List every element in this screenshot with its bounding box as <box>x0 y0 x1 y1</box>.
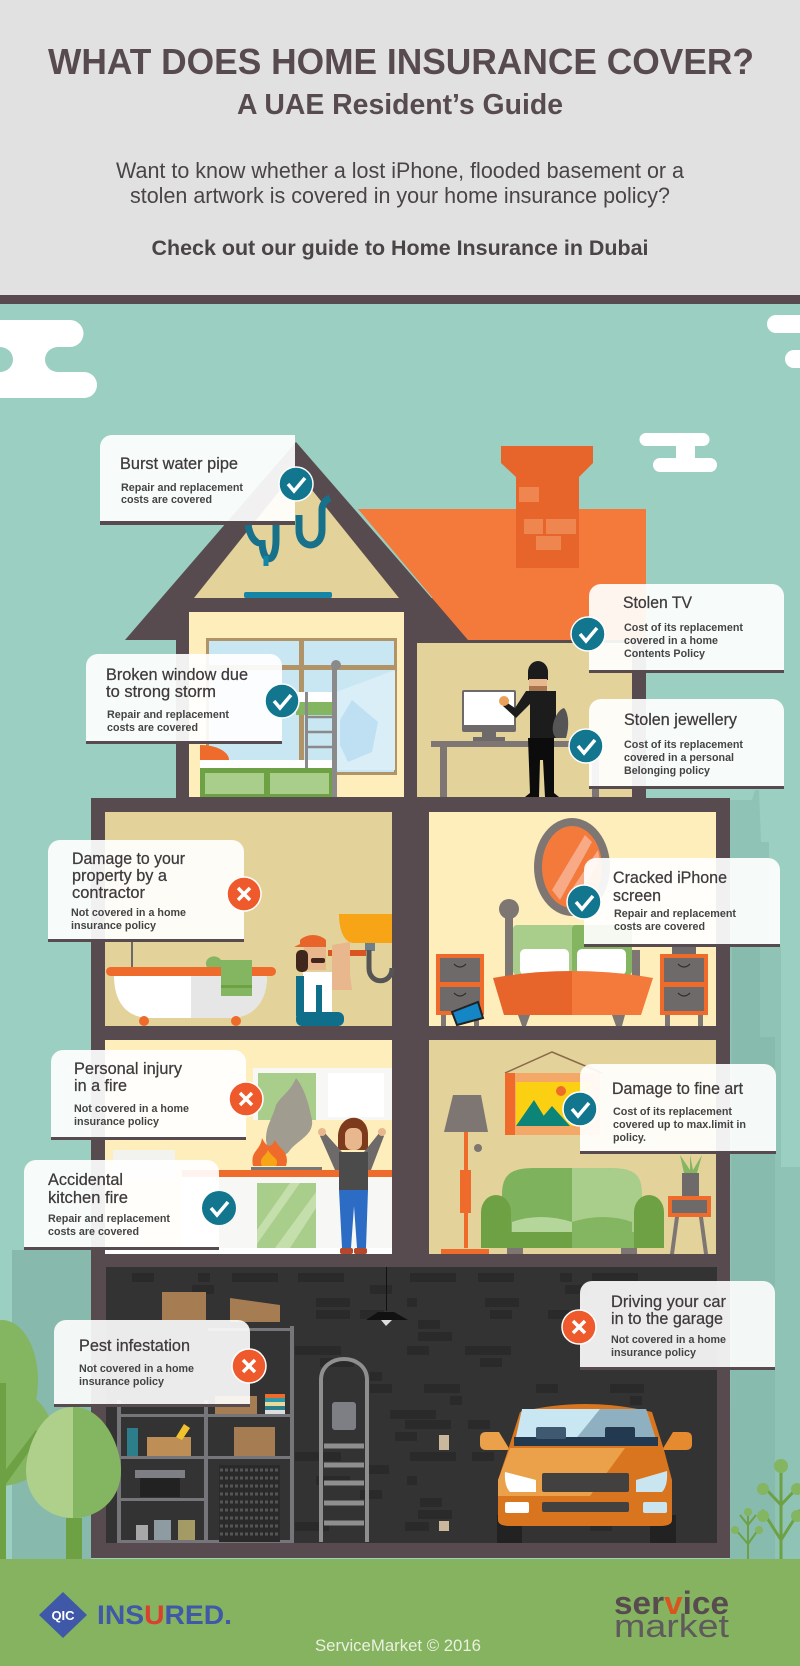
card: Broken window: costs are covered <box>107 722 198 734</box>
cloud: top right <box>767 315 800 368</box>
intro text: stolen artwork is covered in your home insurance policy? <box>130 183 670 208</box>
card: Stolen jewellery: Stolen jewellery <box>624 711 738 729</box>
toolbox dark <box>135 1470 185 1497</box>
card: Stolen jewellery <box>569 699 784 789</box>
nightstand: left <box>436 954 484 1026</box>
house: main floors frame <box>91 798 730 1558</box>
logo: ServiceMarket: market <box>614 1608 729 1644</box>
house: attic frame <box>125 442 468 640</box>
logo: ServiceMarket: service <box>614 1585 729 1621</box>
card: Personal injury: Personal injury <box>74 1060 183 1078</box>
bed <box>493 899 653 1026</box>
card: Contractor damage: Not covered in a home <box>71 907 186 919</box>
card: Contractor damage: property by a <box>72 867 168 885</box>
cloud: top left <box>0 320 97 398</box>
card: Accidental kitchen fire <box>24 1160 236 1250</box>
logo: QIC Insured <box>39 1592 232 1638</box>
roof: orange <box>358 509 646 640</box>
card: Stolen jewellery: Belonging policy <box>624 765 711 777</box>
card: Accidental kitchen fire: costs are covered <box>48 1226 139 1238</box>
card: Driving your car: Driving your car <box>611 1293 726 1311</box>
icon: check <box>279 467 313 501</box>
rack of tyres <box>219 1465 280 1542</box>
smoke <box>266 1078 312 1156</box>
card: Damage to fine art: policy. <box>613 1132 646 1144</box>
card: Broken window <box>86 654 299 744</box>
card: Damage to fine art: Damage to fine art <box>612 1080 743 1098</box>
icon: computer monitor <box>462 690 516 741</box>
side table with plant <box>668 1155 711 1254</box>
fire <box>251 1138 322 1170</box>
call to action: Check out our guide to Home Insurance in Dubai <box>152 236 648 260</box>
card: Burst water pipe: Burst water pipe <box>120 455 238 473</box>
card: Cracked iPhone: Cracked iPhone <box>613 869 727 887</box>
panel: garage <box>106 1267 717 1543</box>
card: Accidental kitchen fire: kitchen fire <box>48 1189 128 1207</box>
stacked books <box>265 1394 285 1414</box>
header divider band <box>0 295 800 304</box>
ground <box>0 1559 800 1666</box>
tree: left light <box>26 1407 121 1559</box>
icon: burst pipes <box>248 498 330 566</box>
shelving unit <box>117 1292 294 1543</box>
icon: check <box>567 885 601 919</box>
subtitle: A UAE Resident’s Guide <box>237 89 563 121</box>
logo: ServiceMarket <box>614 1585 729 1644</box>
card: Stolen jewellery: Cost of its replacement <box>624 739 743 751</box>
card: Driving your car <box>562 1281 775 1370</box>
boxes <box>127 1292 280 1456</box>
painting <box>505 1052 602 1135</box>
card: Contractor damage: insurance policy <box>71 920 157 932</box>
woman <box>318 1118 386 1254</box>
card: Broken window: Repair and replacement <box>107 709 229 721</box>
card: Damage to fine art: Cost of its replacement <box>613 1106 732 1118</box>
burglar <box>499 661 568 797</box>
card: Stolen TV <box>571 584 784 673</box>
panel: bedroom <box>429 812 716 1026</box>
QIC diamond: QIC <box>51 1608 75 1623</box>
card: Cracked iPhone: costs are covered <box>614 921 705 933</box>
car <box>480 1404 692 1543</box>
plumber <box>294 914 392 1026</box>
mirror <box>534 818 610 916</box>
floor lamp <box>441 1095 489 1254</box>
card: Accidental kitchen fire: Repair and replacement <box>48 1213 170 1225</box>
card: Contractor damage <box>48 840 261 942</box>
icon: check <box>571 617 605 651</box>
card: Contractor damage: Damage to your <box>72 850 185 868</box>
panel: sky background <box>0 304 800 1560</box>
title: WHAT DOES HOME INSURANCE COVER? <box>48 41 754 82</box>
icon: check <box>563 1092 597 1126</box>
icon: check <box>569 729 603 763</box>
card: Damage to fine art: covered up to max.limit in <box>613 1119 746 1131</box>
card: Burst water pipe: costs are covered <box>121 494 212 506</box>
plants: right <box>731 1459 800 1559</box>
background: skyscraper right <box>730 790 800 1559</box>
bathtub <box>106 956 276 1026</box>
card: Damage to fine art <box>563 1064 776 1154</box>
cloud: near chimney <box>640 433 717 472</box>
card: Stolen TV: Contents Policy <box>624 648 706 660</box>
card: Personal injury: Not covered in a home <box>74 1103 189 1115</box>
icon: check <box>265 684 299 718</box>
card: Stolen TV: Cost of its replacement <box>624 622 743 634</box>
light switches <box>439 1435 449 1531</box>
intro text: Want to know whether a lost iPhone, flooded basement or a <box>116 158 684 183</box>
sofa <box>481 1168 664 1254</box>
card: Burst water pipe <box>100 435 313 525</box>
panel: header <box>0 0 800 295</box>
house: upper walls <box>176 598 646 800</box>
card: Stolen jewellery: covered in a personal <box>624 752 734 764</box>
icon: cross <box>229 1082 263 1116</box>
panel: bathroom <box>105 812 392 1026</box>
background: building left <box>12 1250 91 1559</box>
ceiling lamp <box>366 1267 408 1326</box>
card: Driving your car: Not covered in a home <box>611 1334 726 1346</box>
tree: left dark <box>0 1320 53 1559</box>
icon: cross <box>227 877 261 911</box>
logo: QIC Insured: INSURED. <box>97 1600 232 1630</box>
card: Stolen TV: covered in a home <box>624 635 718 647</box>
nightstand: right <box>660 947 708 1026</box>
icon: cross <box>562 1310 596 1344</box>
card: Personal injury <box>51 1050 263 1140</box>
footer credit: ServiceMarket © 2016 <box>315 1636 481 1655</box>
panel: office room <box>417 643 632 797</box>
card: Accidental kitchen fire: Accidental <box>48 1171 123 1189</box>
card: Stolen TV: Stolen TV <box>623 594 692 612</box>
card: Personal injury: insurance policy <box>74 1116 160 1128</box>
card: Driving your car: in to the garage <box>611 1310 723 1328</box>
card: Personal injury: in a fire <box>74 1077 127 1095</box>
card: Driving your car: insurance policy <box>611 1347 697 1359</box>
card: Cracked iPhone: screen <box>613 887 661 905</box>
card: Contractor damage: contractor <box>72 884 145 902</box>
card: Pest infestation: Pest infestation <box>79 1337 190 1355</box>
paint cans <box>136 1520 195 1540</box>
chimney <box>501 446 593 568</box>
panel: kitchen <box>105 1040 392 1254</box>
card: Pest infestation: Not covered in a home <box>79 1363 194 1375</box>
card: Burst water pipe: Repair and replacement <box>121 482 243 494</box>
brick wall texture <box>132 1273 644 1531</box>
card: Pest infestation: insurance policy <box>79 1376 165 1388</box>
card: Broken window: Broken window due <box>106 666 248 684</box>
panel: bunk room <box>189 612 404 797</box>
icon: cracked phone <box>452 1002 483 1025</box>
desk <box>431 741 599 797</box>
icon: cross <box>232 1349 266 1383</box>
card: Cracked iPhone <box>567 858 780 947</box>
icon: check <box>202 1191 236 1225</box>
card: Pest infestation <box>54 1320 266 1407</box>
card: Cracked iPhone: Repair and replacement <box>614 908 736 920</box>
panel: living room <box>429 1040 716 1254</box>
stepladder <box>321 1359 367 1542</box>
QIC diamond <box>39 1592 87 1638</box>
card: Broken window: to strong storm <box>106 683 216 701</box>
